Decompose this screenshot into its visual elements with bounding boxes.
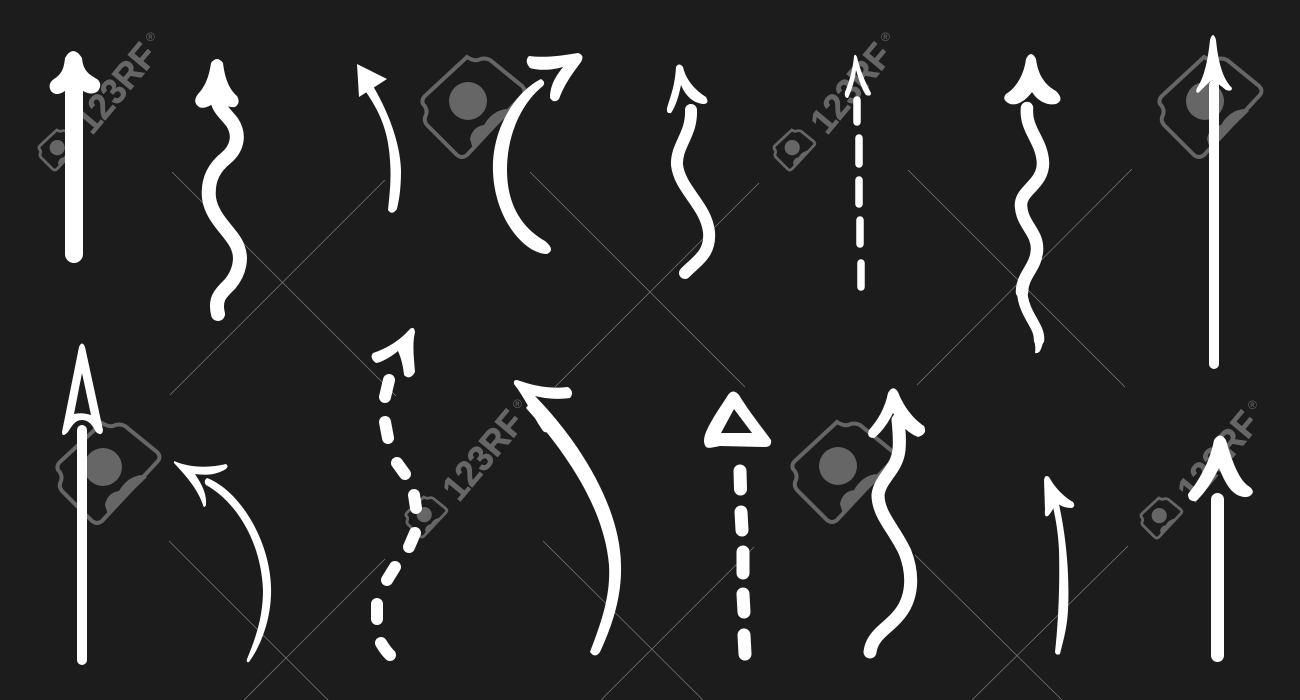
arrow: thick straight with rounded head [50,51,100,263]
arrow: thin arc curving to upper left [174,461,271,662]
watermark: small logo and wordmark, top centre right: ® [881,30,890,44]
watermark: large logo, top right [1159,57,1262,157]
arrow: large arc curving to upper left [514,380,621,656]
arrow: thick wavy with rounded head [195,59,240,314]
watermark: large logo, top centre left [422,57,524,157]
arrow: thin tapered slight curve [1044,476,1074,655]
watermark: small logo and wordmark, top left [39,30,165,170]
watermark: small logo and wordmark, bottom centre left: ® [513,397,522,411]
arrow: bold wavy with open head [868,388,925,652]
watermark: small logo and wordmark, bottom centre left: 123RF [434,402,532,508]
arrow: tall straight with narrow head [1196,35,1232,369]
watermark: large logo, bottom centre right [792,422,894,522]
watermark: small logo and wordmark, top centre right [774,30,900,170]
arrow: thin curved with triangular head [357,64,401,213]
watermark: large logo, bottom left [57,423,159,523]
watermark: small logo and wordmark, top left: 123RF [67,35,165,141]
arrow: thin dashed straight [845,55,871,287]
arrow: straight with detached caret head [1188,436,1253,662]
arrow: thick dashed wavy [372,328,416,655]
watermark: small logo and wordmark, bottom centre left [406,397,532,537]
watermark: small logo and wordmark, bottom right: 123RF [1169,403,1267,509]
watermark: small logo and wordmark, bottom right: ® [1248,398,1257,412]
arrow: long wavy with rounded head [1004,54,1060,353]
watermark: small logo and wordmark, bottom right [1141,398,1267,538]
watermark: small logo and wordmark, top centre right: 123RF [802,35,900,141]
arrow: short wavy with open head [667,64,709,273]
watermark: small logo and wordmark, top left: ® [146,30,155,44]
arrow: thick dashed with hollow triangle head [704,392,771,654]
arrow: straight with hollow triangular head [62,344,103,665]
arrow: bold arc curving to upper right [493,53,582,254]
